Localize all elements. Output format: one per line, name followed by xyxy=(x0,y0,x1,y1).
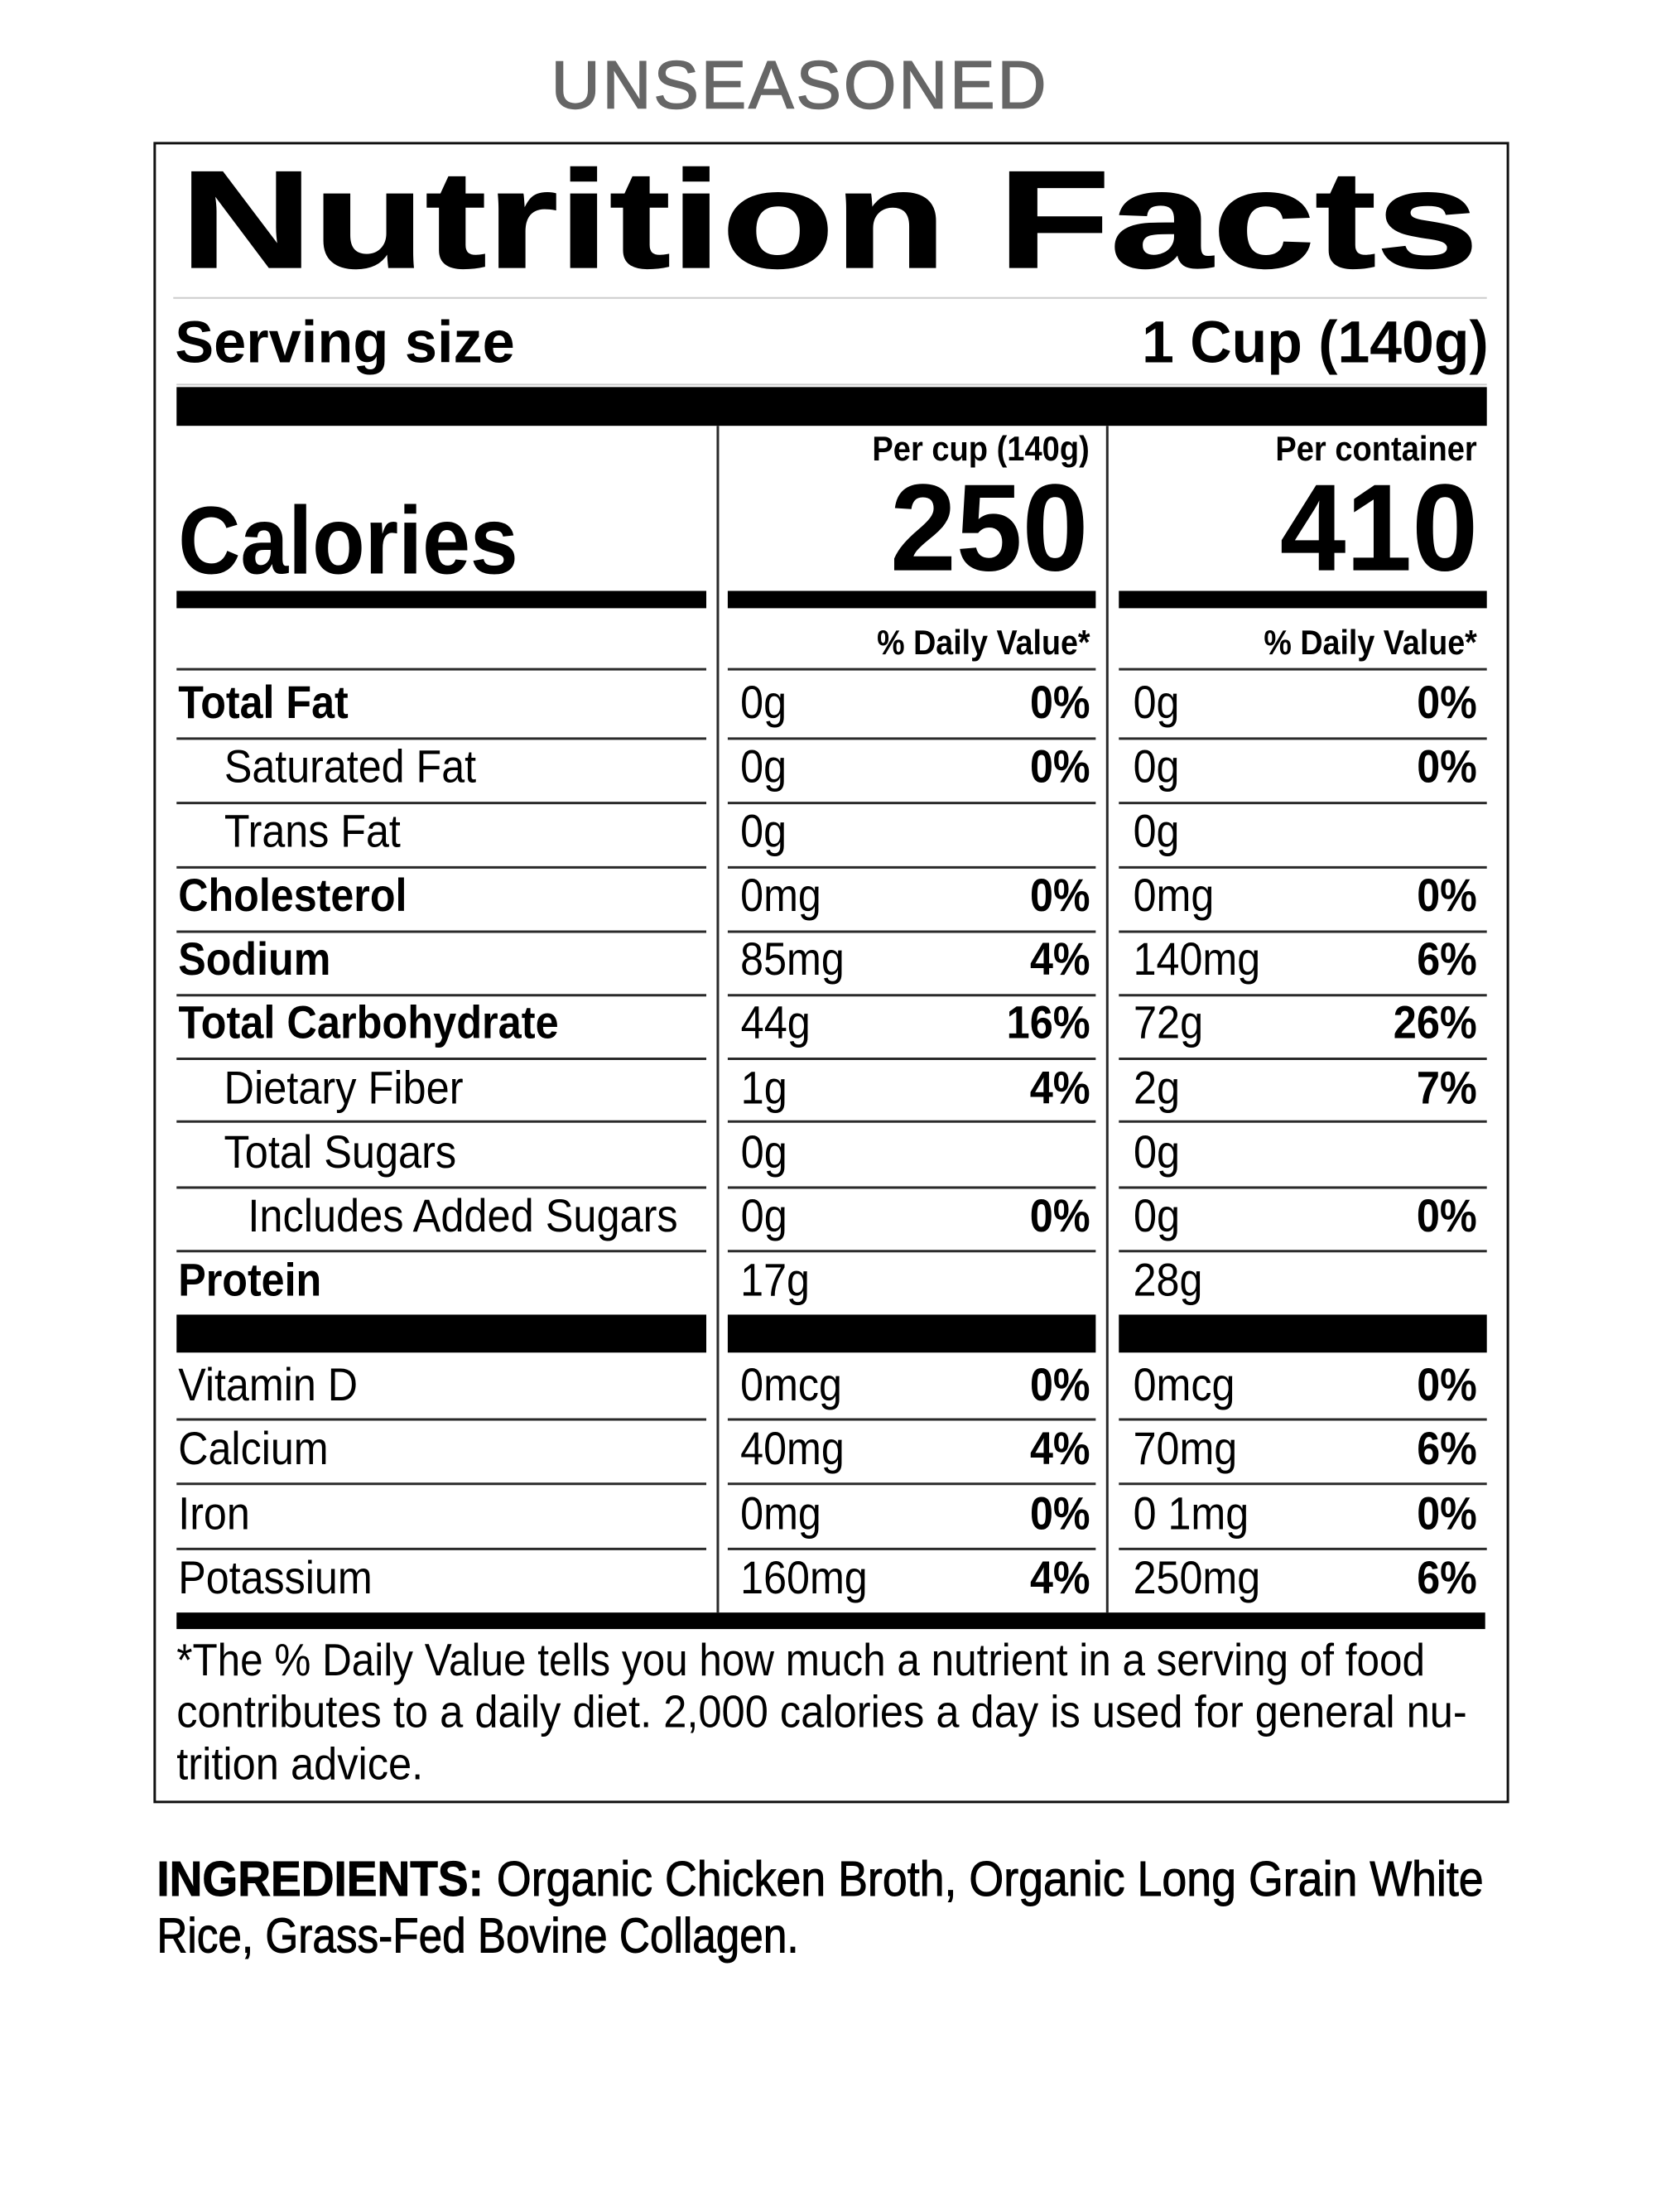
daily value header: per container: % Daily Value* xyxy=(1264,624,1477,663)
row: vitamin d: Vitamin D xyxy=(178,1360,358,1411)
row: dietary fiber: 1g xyxy=(741,1063,787,1114)
row: cholesterol: 0% xyxy=(1417,870,1477,922)
row: calcium: 4% xyxy=(1030,1423,1090,1474)
row: sodium: 6% xyxy=(1417,933,1477,985)
footnote: contributes to a daily diet. 2,000 calories a day is used for general nu- xyxy=(176,1686,1467,1737)
thick bar: bottom xyxy=(176,1612,1485,1629)
row: protein: 28g xyxy=(1134,1255,1202,1306)
row: vitamin d: 0% xyxy=(1417,1360,1477,1411)
column header: per container: Per container xyxy=(1275,430,1477,468)
row: total fat: 0g xyxy=(1134,677,1179,729)
row: iron: 0% xyxy=(1417,1488,1477,1540)
row: potassium xyxy=(178,1553,1477,1604)
row: dietary fiber: 4% xyxy=(1030,1063,1090,1114)
footnote xyxy=(176,1634,1467,1789)
calories value: per cup: 250 xyxy=(890,459,1088,597)
ingredients: Organic Chicken Broth, Organic Long Grain White xyxy=(497,1851,1484,1906)
column header: per cup: Per cup (140g) xyxy=(872,430,1090,468)
row: potassium: 6% xyxy=(1417,1553,1477,1604)
row: sodium: 140mg xyxy=(1134,933,1260,985)
row: dietary fiber: Dietary Fiber xyxy=(224,1063,464,1114)
row: calcium xyxy=(178,1423,1477,1474)
ingredients xyxy=(156,1851,1484,1964)
row: potassium: 160mg xyxy=(740,1553,868,1604)
row: iron: 0mg xyxy=(740,1488,821,1540)
row: cholesterol xyxy=(178,870,1477,922)
row: calcium: Calcium xyxy=(178,1423,329,1474)
row: cholesterol: 0% xyxy=(1030,870,1090,922)
row: total carbohydrate: 26% xyxy=(1394,997,1477,1048)
row: vitamin d: 0mcg xyxy=(740,1360,842,1411)
row: total fat: 0% xyxy=(1030,677,1090,729)
row: includes added sugars: Includes Added Sugars xyxy=(248,1190,678,1241)
row: total carbohydrate: Total Carbohydrate xyxy=(179,997,559,1048)
row: saturated fat: 0g xyxy=(740,741,787,793)
row: saturated fat: 0% xyxy=(1030,741,1090,793)
row: iron: 0 1mg xyxy=(1134,1488,1249,1540)
row: trans fat: 0g xyxy=(740,806,787,857)
calories value: per container: 410 xyxy=(1280,459,1478,597)
row: total carbohydrate: 16% xyxy=(1007,997,1090,1048)
row: trans fat: Trans Fat xyxy=(224,806,401,857)
ingredients: INGREDIENTS: xyxy=(156,1851,484,1906)
thick bars under protein xyxy=(176,1314,1487,1352)
row: trans fat xyxy=(224,806,1179,857)
row: potassium: 250mg xyxy=(1134,1553,1260,1604)
row: vitamin d xyxy=(178,1360,1477,1411)
row: vitamin d: 0% xyxy=(1030,1360,1090,1411)
row: total carbohydrate xyxy=(179,997,1477,1048)
row: includes added sugars xyxy=(248,1190,1477,1241)
row: cholesterol: 0mg xyxy=(740,870,821,922)
row: saturated fat: Saturated Fat xyxy=(224,741,476,793)
row: total sugars xyxy=(224,1127,1180,1178)
row: protein xyxy=(178,1255,1202,1306)
row: cholesterol: Cholesterol xyxy=(178,870,407,922)
row: dietary fiber: 7% xyxy=(1417,1063,1477,1114)
row: iron: 0% xyxy=(1030,1488,1090,1540)
row: sodium: 4% xyxy=(1030,933,1090,985)
row: dietary fiber xyxy=(224,1063,1477,1114)
row: total sugars: 0g xyxy=(741,1127,787,1178)
row: includes added sugars: 0% xyxy=(1417,1190,1477,1241)
row: protein: 17g xyxy=(740,1255,810,1306)
daily value header: per cup: % Daily Value* xyxy=(877,624,1090,663)
row: cholesterol: 0mg xyxy=(1134,870,1214,922)
row: total sugars: 0g xyxy=(1134,1127,1180,1178)
row: includes added sugars: 0g xyxy=(1134,1190,1180,1241)
row: sodium xyxy=(178,933,1477,985)
row: includes added sugars: 0% xyxy=(1030,1190,1090,1241)
row: calcium: 40mg xyxy=(740,1423,845,1474)
row: calcium: 70mg xyxy=(1134,1423,1237,1474)
row: dietary fiber: 2g xyxy=(1134,1063,1180,1114)
row: iron xyxy=(178,1488,1477,1540)
serving size value: 1 Cup (140g) xyxy=(1142,309,1489,375)
thick bars under calories xyxy=(176,590,1487,608)
row: potassium: Potassium xyxy=(178,1553,373,1604)
row: total fat: 0g xyxy=(740,677,787,729)
calories label: Calories xyxy=(178,488,518,595)
heading: unseasoned: UNSEASONED xyxy=(551,48,1047,123)
row: trans fat: 0g xyxy=(1134,806,1179,857)
row: saturated fat xyxy=(224,741,1477,793)
row: iron: Iron xyxy=(178,1488,250,1540)
ingredients: Rice, Grass-Fed Bovine Collagen. xyxy=(156,1908,799,1964)
row: potassium: 4% xyxy=(1030,1553,1090,1604)
row: total fat: Total Fat xyxy=(178,677,349,729)
row: saturated fat: 0g xyxy=(1134,741,1179,793)
row: total fat: 0% xyxy=(1417,677,1477,729)
row: sodium: Sodium xyxy=(178,933,330,985)
footnote: *The % Daily Value tells you how much a nutrient in a serving of food xyxy=(176,1634,1425,1685)
title: nutrition facts: Nutrition Facts xyxy=(180,142,1479,297)
serving size label: Serving size xyxy=(175,309,515,375)
row: total carbohydrate: 72g xyxy=(1134,997,1203,1048)
row: saturated fat: 0% xyxy=(1417,741,1477,793)
row: includes added sugars: 0g xyxy=(741,1190,787,1241)
panel: nutrition facts label xyxy=(155,142,1508,1802)
footnote: trition advice. xyxy=(176,1737,423,1789)
row: sodium: 85mg xyxy=(740,933,845,985)
thick bar: top xyxy=(176,387,1487,426)
row: total carbohydrate: 44g xyxy=(741,997,811,1048)
row: vitamin d: 0mcg xyxy=(1134,1360,1235,1411)
row: total sugars: Total Sugars xyxy=(224,1127,456,1178)
row: protein: Protein xyxy=(178,1255,321,1306)
row: total fat xyxy=(178,677,1477,729)
row: calcium: 6% xyxy=(1417,1423,1477,1474)
